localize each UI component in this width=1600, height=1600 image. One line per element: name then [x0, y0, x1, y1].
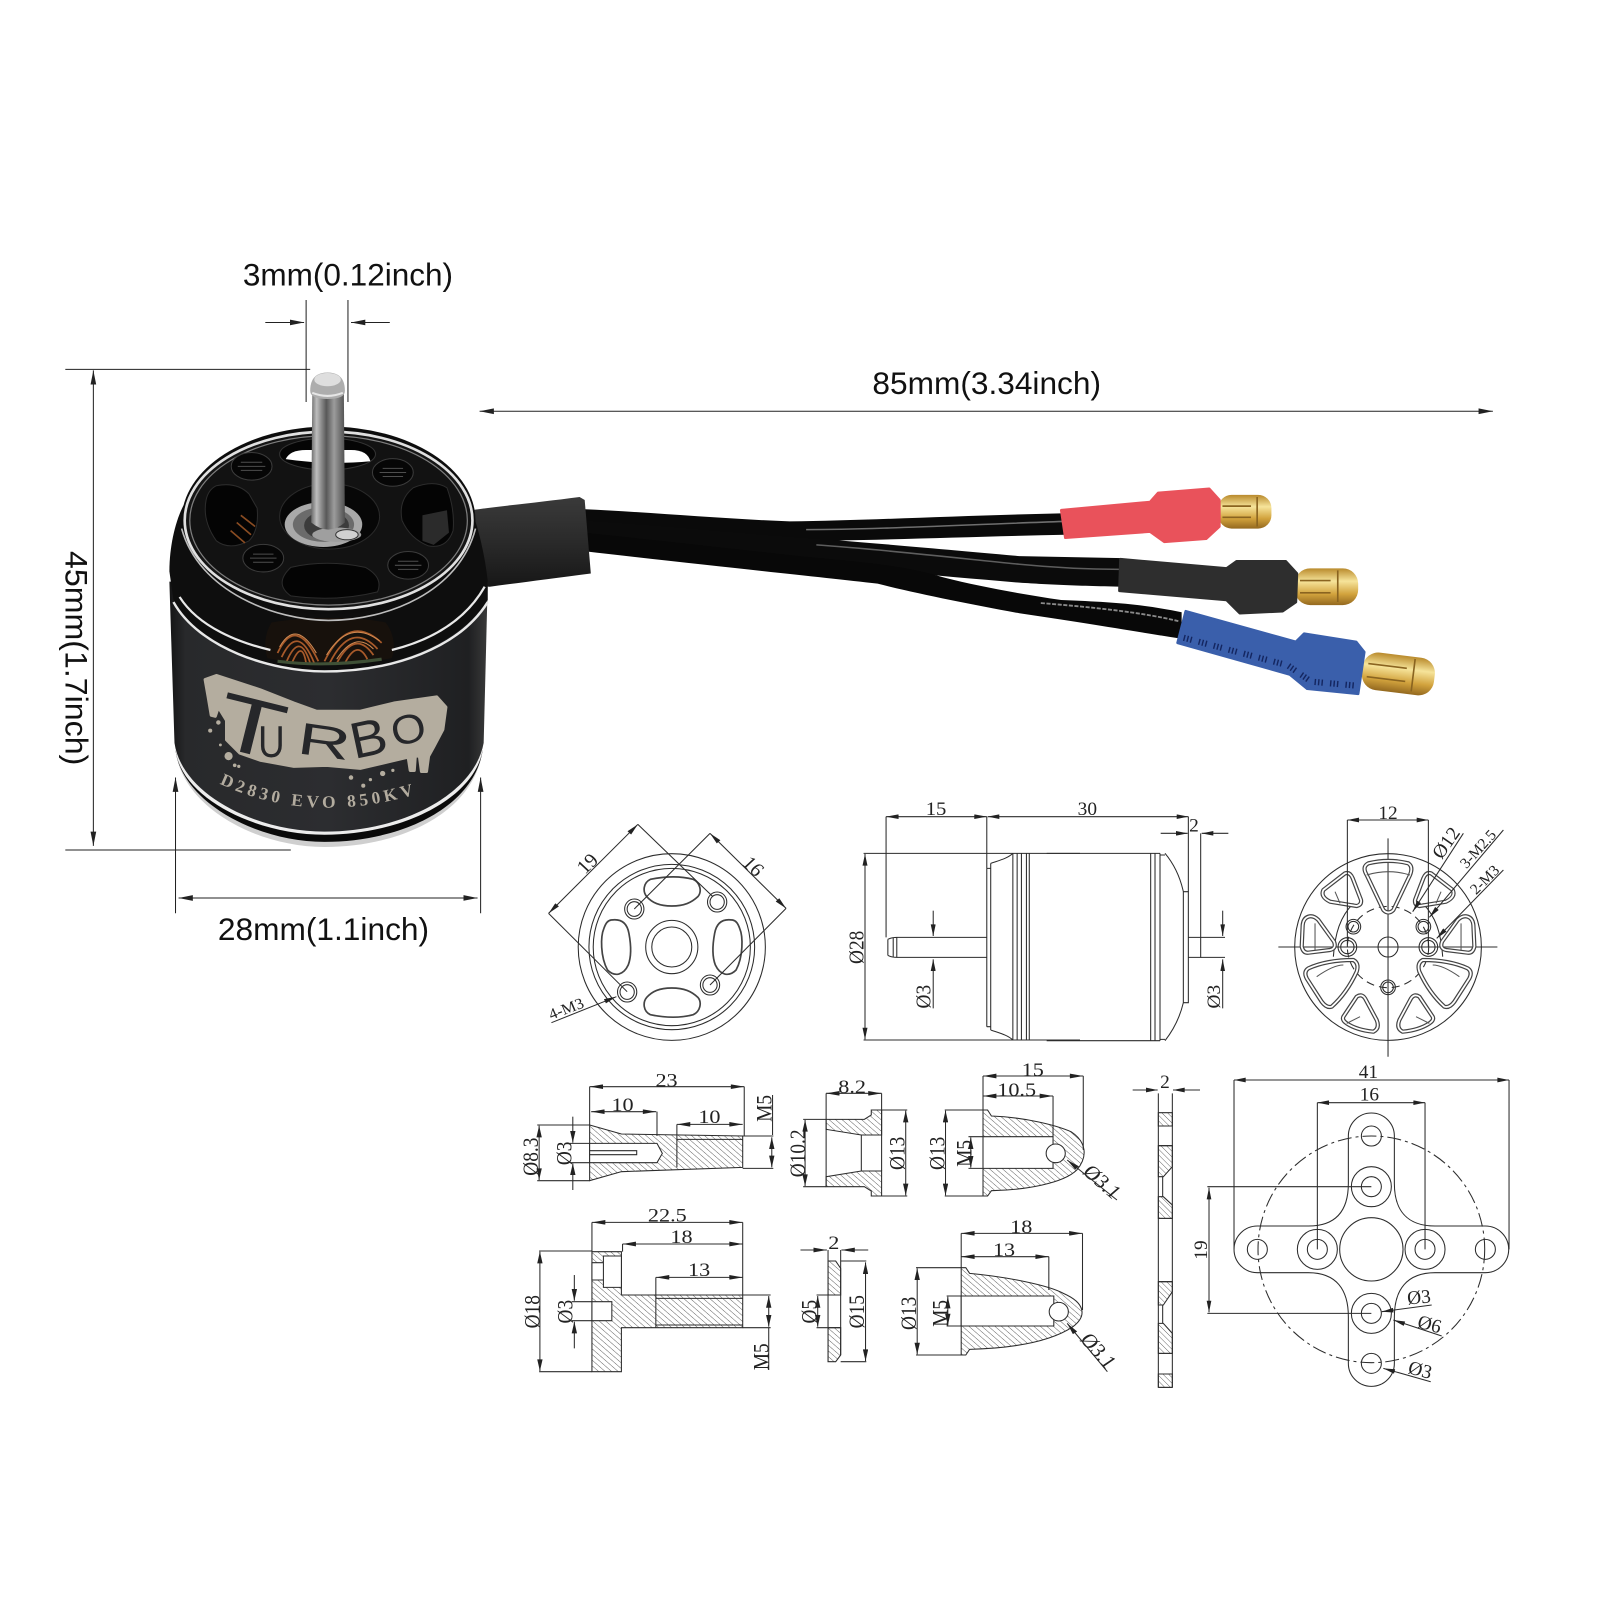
- labels: Ø13: [884, 1137, 910, 1170]
- part: bullet nut 15: [924, 1058, 1127, 1203]
- labels: Ø8.3: [518, 1138, 544, 1176]
- label 16: 16: [1360, 1085, 1379, 1106]
- labels: 18: [1010, 1216, 1032, 1238]
- labels: Ø3.1: [1075, 1329, 1122, 1373]
- blue sleeve printing: [1184, 638, 1357, 686]
- logo wordmark: [208, 675, 431, 778]
- label diameter 28: Ø28: [846, 931, 869, 964]
- hub and bearing: [280, 484, 380, 549]
- label diameter 12: Ø12: [1429, 824, 1465, 863]
- drawing: mount plate: [1191, 1062, 1509, 1386]
- red connector gold tip: [1218, 495, 1271, 529]
- label 41: 41: [1359, 1062, 1378, 1083]
- shaft end cap: [310, 372, 345, 399]
- threaded holes: [231, 453, 429, 579]
- height label: 45mm(1.7inch): [58, 551, 93, 765]
- labels: Ø3: [552, 1300, 578, 1324]
- labels: [796, 1232, 870, 1328]
- labels: 22.5: [648, 1204, 687, 1226]
- label 19: 19: [1191, 1240, 1212, 1260]
- label diameter 6: Ø6: [1415, 1312, 1444, 1338]
- part: washer: [796, 1232, 870, 1362]
- logo wordmark: B: [345, 707, 392, 770]
- black connector sleeve: [1119, 559, 1297, 613]
- drawing: adapter parts: [518, 1058, 1127, 1373]
- red wire: [583, 509, 1065, 541]
- silver body rings: [173, 587, 488, 671]
- drawing: side view, rear end: [988, 799, 1228, 1041]
- label 3-M2.5: 3-M2.5: [1457, 826, 1500, 872]
- motor neck band: [169, 505, 488, 670]
- labels: [896, 1216, 1122, 1373]
- logo: D2830 EVO 850KV: [220, 774, 411, 808]
- label diameter 3 lower: Ø3: [1406, 1357, 1434, 1384]
- labels: M5: [951, 1140, 977, 1167]
- labels: Ø15: [844, 1295, 870, 1328]
- labels: 23: [655, 1069, 678, 1091]
- winding slot: [265, 618, 394, 664]
- labels: Ø10.2: [785, 1129, 810, 1177]
- motor body: [169, 582, 488, 832]
- labels: M5: [748, 1343, 774, 1370]
- labels: Ø13: [896, 1297, 921, 1330]
- label 16: 16: [738, 852, 768, 881]
- label 2-M3: 2-M3: [1467, 862, 1503, 898]
- part: flanged shaft: [519, 1204, 774, 1372]
- logo wordmark: U: [258, 716, 285, 767]
- model text: [219, 784, 410, 808]
- labels: 10.5: [997, 1078, 1036, 1100]
- logo blob: [205, 676, 446, 771]
- drawing: front view: [546, 824, 786, 1040]
- part: collet: [518, 1069, 777, 1190]
- blue connector sleeve: [1178, 611, 1364, 694]
- label 30: 30: [1078, 799, 1097, 820]
- logo splatter: [208, 720, 394, 788]
- labels: Ø18: [519, 1295, 545, 1328]
- labels: Ø13: [924, 1137, 950, 1170]
- blue wire: [583, 533, 1182, 639]
- labels: 10: [698, 1106, 721, 1128]
- labels: 10: [611, 1093, 634, 1115]
- labels: Ø3: [551, 1142, 577, 1165]
- dimension: shaft diameter: [243, 258, 453, 402]
- red connector sleeve: [1061, 489, 1219, 542]
- drawing: mount plate side profile: [1133, 1072, 1200, 1387]
- heat-shrink sleeve: [471, 497, 591, 587]
- dimension: height: [58, 369, 310, 850]
- label 12: 12: [1378, 803, 1398, 824]
- labels: [785, 1076, 910, 1177]
- label diameter 3: Ø3: [913, 985, 936, 1008]
- top slot: [280, 438, 376, 470]
- left slot: [205, 485, 257, 546]
- black connector gold tip: [1295, 568, 1358, 605]
- logo wordmark: R: [295, 712, 354, 770]
- labels: M5: [751, 1095, 777, 1122]
- wires and connectors: [583, 489, 1437, 697]
- wire length label: 85mm(3.34inch): [872, 366, 1101, 401]
- labels: 2: [828, 1232, 839, 1254]
- labels: 15: [1022, 1058, 1044, 1080]
- labels: Ø5: [796, 1300, 822, 1324]
- label 19: 19: [573, 850, 603, 878]
- label 4-M3: 4-M3: [546, 995, 587, 1023]
- motor shaft: [310, 372, 345, 530]
- drawing: rear view: [1278, 803, 1503, 1057]
- labels: 18: [670, 1226, 693, 1248]
- part: spacer: [785, 1076, 910, 1196]
- drawing: side view, shaft end: [846, 799, 1080, 1040]
- bottom slot: [282, 563, 379, 598]
- label diameter 3 upper: Ø3: [1406, 1287, 1432, 1310]
- motor photo: [169, 372, 1477, 887]
- shaft diameter label: 3mm(0.12inch): [243, 258, 453, 293]
- labels: M5: [927, 1300, 953, 1327]
- label 15: 15: [926, 799, 946, 820]
- labels: 13: [688, 1258, 710, 1281]
- top face: [182, 427, 476, 620]
- labels: 13: [993, 1238, 1015, 1261]
- labels: [518, 1069, 777, 1176]
- label diameter 3: Ø3: [1204, 985, 1225, 1008]
- body diameter label: 28mm(1.1inch): [218, 912, 429, 947]
- logo: [204, 674, 448, 808]
- labels: [924, 1058, 1127, 1203]
- part: bullet nut 18: [896, 1216, 1122, 1373]
- labels: Ø3.1: [1078, 1160, 1127, 1203]
- blue connector gold tip: [1360, 651, 1437, 697]
- label 2: 2: [1189, 816, 1199, 837]
- motor base rim: [176, 750, 483, 847]
- right slot: [401, 484, 453, 546]
- logo wordmark: O: [386, 703, 431, 756]
- labels: 8.2: [838, 1076, 866, 1098]
- label 2: 2: [1160, 1072, 1170, 1093]
- labels: [519, 1204, 774, 1370]
- logo wordmark: T: [208, 675, 295, 778]
- black wire: [583, 520, 1122, 587]
